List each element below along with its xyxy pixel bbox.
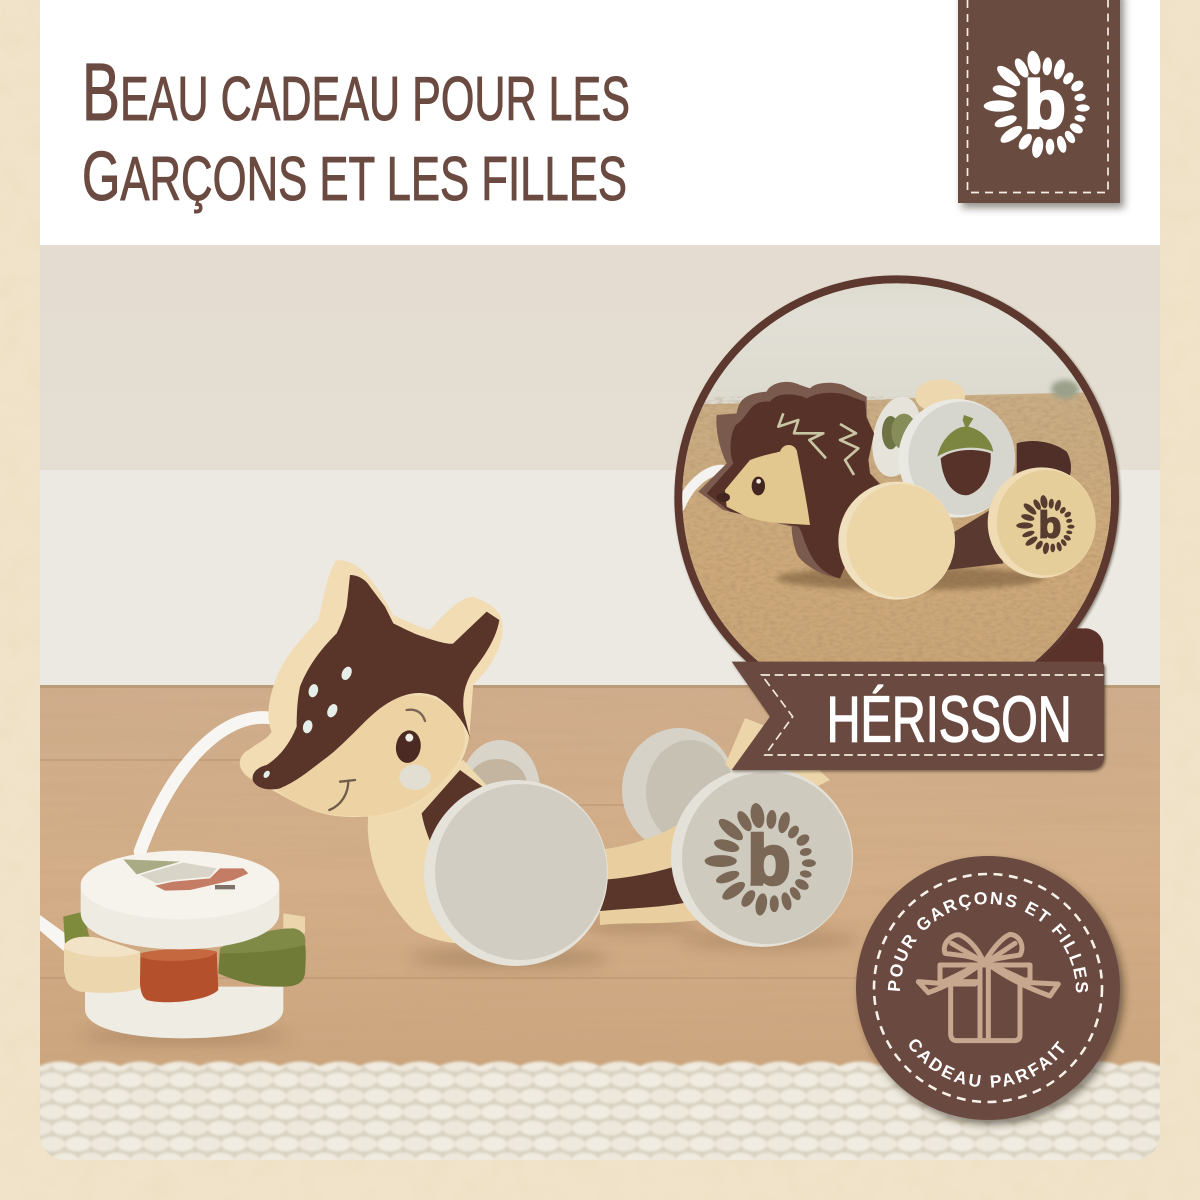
body	[368, 760, 507, 944]
rear wheel left	[460, 740, 540, 840]
ribbon fold	[1040, 628, 1103, 667]
floor shadows	[80, 919, 860, 1043]
wood floor	[40, 685, 1160, 1070]
pull string	[140, 717, 273, 852]
fawn pull toy	[140, 560, 853, 966]
back petals	[63, 912, 90, 945]
string	[680, 470, 730, 507]
gift badge	[854, 856, 1130, 1130]
neck stripe	[422, 770, 485, 845]
rolling pull toy	[40, 851, 306, 1038]
cream rear wheel	[988, 467, 1096, 578]
badge bottom text: CADEAU PARFAIT	[909, 1039, 1064, 1088]
spots	[262, 665, 354, 779]
backdrop	[701, 283, 1092, 410]
rear wheel right	[622, 728, 736, 852]
green pegs	[882, 414, 913, 450]
cream front wheel	[838, 482, 955, 600]
front wheel	[424, 780, 608, 966]
gift icon	[918, 934, 1058, 1041]
wheel with logo	[671, 767, 853, 947]
ribbon label: HÉRISSON	[827, 683, 1072, 756]
white ring	[872, 396, 919, 477]
badge stitching	[874, 874, 1102, 1102]
wheel logo	[705, 802, 816, 916]
top disc	[81, 887, 279, 949]
title: BEAU CADEAU POUR LES	[82, 47, 630, 138]
circle frame	[678, 279, 1115, 716]
ribbon	[732, 662, 1104, 770]
brand tag	[958, 0, 1120, 203]
wheel logo: b	[748, 821, 790, 899]
rear body	[598, 815, 700, 925]
eye	[394, 729, 423, 765]
mat shadow	[777, 567, 1043, 590]
header band	[40, 0, 1160, 245]
tail	[725, 718, 830, 800]
brow	[407, 710, 425, 721]
tag body	[958, 0, 1120, 203]
cream peg	[915, 380, 965, 409]
burlap mat	[682, 392, 1111, 662]
acorn	[937, 415, 993, 495]
face	[273, 695, 465, 816]
green petal	[218, 928, 306, 987]
hedgehog body	[698, 382, 883, 578]
badge top text: POUR GARÇONS ET FILLES	[888, 892, 1088, 992]
tag stitching	[968, 0, 1108, 192]
fawn body and head	[140, 560, 507, 944]
inset photo	[682, 283, 1111, 662]
lower chassis	[947, 510, 1003, 570]
title: GARÇONS ET LES FILLES	[82, 137, 627, 215]
red petal	[140, 949, 218, 1002]
disc print	[123, 859, 248, 891]
brand logo: b	[1025, 69, 1065, 143]
cheek	[399, 765, 431, 790]
hedgehog face	[717, 445, 810, 525]
bottom disc	[85, 987, 283, 1038]
knitted rug	[40, 1060, 1160, 1160]
skirting board	[40, 470, 1160, 688]
plant blur	[1051, 380, 1079, 399]
wall	[40, 245, 1160, 475]
brown mask	[253, 575, 499, 789]
photo panel	[0, 245, 1200, 1180]
cream petal	[64, 937, 140, 993]
title	[82, 47, 630, 215]
rear dark axle	[1016, 441, 1071, 476]
badge disc	[856, 856, 1120, 1120]
quills	[778, 413, 858, 475]
acorn wheel	[898, 399, 1015, 518]
brand logo	[984, 50, 1090, 159]
ribbon stitching	[762, 675, 1103, 755]
inset hedgehog circle	[670, 270, 1120, 770]
trailing string	[40, 915, 77, 955]
rear wheel logo: b	[1039, 504, 1061, 545]
head silhouette	[240, 560, 503, 817]
mouth	[329, 780, 355, 810]
